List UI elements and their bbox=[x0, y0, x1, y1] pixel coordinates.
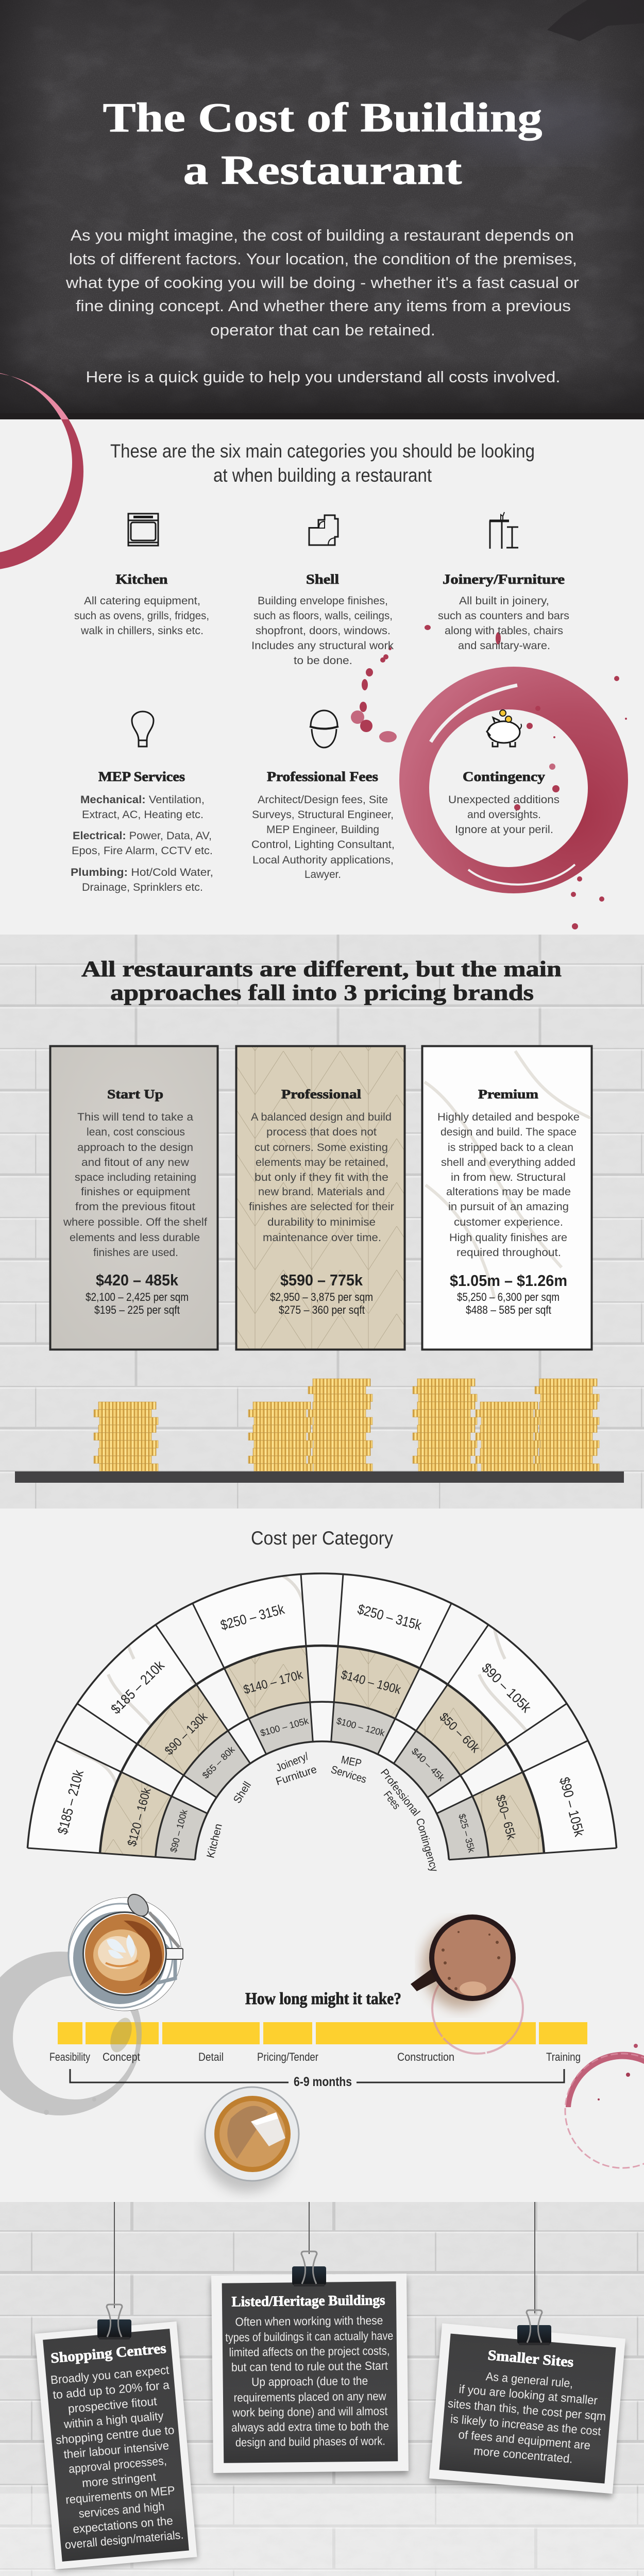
fan middle ring labels: $50 – 60k bbox=[436, 1710, 482, 1756]
card: premium: required throughout. bbox=[456, 1247, 561, 1259]
card: professional: but only if they fit with the bbox=[255, 1172, 388, 1183]
card: start up: elements and less durable bbox=[70, 1232, 200, 1244]
card: start up: $2,100 – 2,425 per sqm bbox=[86, 1291, 189, 1303]
fan middle ring labels: $90 – 130k bbox=[162, 1709, 211, 1758]
icon: bar counter and stool bbox=[489, 512, 518, 549]
card: start up: finishes are used. bbox=[93, 1247, 178, 1259]
illustration: latte cup bbox=[68, 1890, 183, 2011]
heading: six categories: at when building a restaurant bbox=[213, 465, 432, 486]
hanging note: listed and heritage buildings: Listed/Heritage Buildings bbox=[231, 2292, 385, 2310]
hanging note: listed and heritage buildings: requirements placed on any new bbox=[233, 2389, 386, 2404]
category: MEP services: Epos, Fire Alarm, CCTV etc. bbox=[72, 845, 213, 857]
category: professional fees: Professional Fees bbox=[267, 769, 378, 784]
fan middle ring labels: $140 – 190k bbox=[340, 1668, 403, 1697]
hanging note: shopping centres: expectations on the bbox=[72, 2514, 174, 2536]
wine stain: right ring bbox=[565, 2044, 644, 2168]
panel: paper categories background bbox=[0, 419, 644, 935]
timeline labels bbox=[49, 2050, 581, 2063]
category: MEP services: Electrical: Power, Data, AV, bbox=[73, 830, 212, 842]
timeline labels: Pricing/Tender bbox=[257, 2050, 318, 2063]
fan grid lines bbox=[27, 1573, 617, 1860]
intro text: As you might imagine, the cost of building a restaurant depends on bbox=[71, 226, 574, 244]
category: professional fees: MEP Engineer, Building bbox=[266, 824, 379, 836]
card: start up: $195 – 225 per sqft bbox=[94, 1303, 180, 1316]
fan middle ring labels bbox=[125, 1668, 518, 1848]
title bbox=[103, 95, 542, 193]
category: shell: shopfront, doors, windows. bbox=[256, 625, 391, 637]
hanging note: shopping centres: more stringent bbox=[81, 2470, 157, 2489]
card: premium: $1.05m – $1.26m bbox=[450, 1272, 567, 1290]
card: professional: new brand. Materials and bbox=[258, 1186, 385, 1198]
fan category labels: Services bbox=[330, 1764, 368, 1786]
timeline labels: Construction bbox=[397, 2050, 454, 2063]
card: premium: shell and everything added bbox=[441, 1157, 575, 1168]
category: kitchen bbox=[74, 514, 209, 637]
card: start up bbox=[50, 1046, 217, 1350]
card: start up: finishes or equipment bbox=[81, 1186, 190, 1198]
coin stacks bbox=[94, 1379, 599, 1471]
category: contingency: and oversights. bbox=[467, 809, 541, 821]
title: The Cost of Building bbox=[103, 95, 542, 141]
hanging note: smaller sites: As a general rule, bbox=[485, 2369, 573, 2390]
category: joinery and furniture: along with tables, chairs bbox=[445, 625, 563, 637]
intro text bbox=[65, 226, 579, 386]
fan category labels: Shell bbox=[231, 1780, 253, 1805]
duration bracket bbox=[70, 2069, 564, 2089]
icon: light bulb bbox=[132, 711, 154, 747]
hanging note: listed and heritage buildings: design and build phases of work. bbox=[235, 2434, 385, 2449]
card: premium: Highly detailed and bespoke bbox=[437, 1111, 580, 1123]
card: professional: finishes are selected for their bbox=[249, 1201, 394, 1213]
hanging note: listed and heritage buildings: types of buildings it can actually have bbox=[225, 2329, 393, 2344]
card: professional: maintenance over time. bbox=[263, 1232, 381, 1244]
card: start up: Start Up bbox=[107, 1088, 163, 1101]
category: MEP services: MEP Services bbox=[98, 769, 185, 784]
hanging note: shopping centres: overall design/materials. bbox=[64, 2528, 184, 2551]
category: joinery and furniture bbox=[438, 512, 569, 652]
fan middle ring labels: $120 – 160k bbox=[125, 1786, 154, 1848]
hanging note: shopping centres: Shopping Centres bbox=[50, 2341, 167, 2366]
category: kitchen: walk in chillers, sinks etc. bbox=[80, 625, 204, 637]
hanging note: listed and heritage buildings: work being done) and will almost bbox=[232, 2404, 388, 2419]
hanging note: smaller sites: is likely to increase as the cost bbox=[450, 2412, 602, 2438]
fan outer ring labels: $90 – 105k bbox=[479, 1660, 534, 1716]
card: professional: process that does not bbox=[266, 1126, 377, 1138]
category: contingency bbox=[448, 710, 560, 836]
fan category labels: Professional bbox=[378, 1767, 422, 1818]
hanging note: smaller sites: of fees and equipment are bbox=[458, 2428, 591, 2452]
intro text: what type of cooking you will be doing - whether it's a fast casual or bbox=[65, 274, 579, 292]
illustration: iced coffee glass bbox=[202, 2087, 299, 2192]
card: professional: $590 – 775k bbox=[280, 1271, 363, 1289]
card: premium: in pursuit of an amazing bbox=[448, 1201, 569, 1213]
fan category labels: MEP bbox=[340, 1754, 363, 1770]
timeline labels: Concept bbox=[103, 2050, 140, 2063]
hanging note: shopping centres: their labour intensive bbox=[63, 2438, 170, 2461]
hanging note: smaller sites bbox=[429, 2202, 625, 2498]
fan outer ring labels: $90 – 105k bbox=[556, 1775, 587, 1838]
card: start up: and fitout of any new bbox=[81, 1157, 190, 1168]
hanging note: shopping centres: to add up to 20% for a bbox=[52, 2378, 170, 2401]
hanging note: listed and heritage buildings: Up approach (due to the bbox=[251, 2374, 368, 2388]
icon: bulldog clip bbox=[97, 2304, 131, 2340]
fan inner ring labels: $40 – 45k bbox=[410, 1746, 447, 1784]
hanging note: shopping centres: Broadly you can expect bbox=[50, 2363, 170, 2387]
category: shell: Building envelope finishes, bbox=[258, 595, 388, 607]
hanging note: shopping centres: prospective fitout bbox=[67, 2394, 158, 2415]
card: premium: alterations may be made bbox=[446, 1186, 571, 1198]
card: professional: elements may be retained, bbox=[256, 1157, 388, 1168]
heading: how long might it take: How long might it take? bbox=[245, 1990, 401, 2008]
category: contingency: Ignore at your peril. bbox=[455, 824, 553, 836]
hanging note: shopping centres: services and high bbox=[78, 2499, 165, 2520]
icon: oven bbox=[128, 514, 158, 546]
category: joinery and furniture: All built in joinery, bbox=[459, 595, 549, 607]
fan outer ring labels: $185 – 210k bbox=[55, 1768, 87, 1836]
timeline labels: Detail bbox=[198, 2050, 224, 2063]
hanging note: shopping centres: shopping centre due to bbox=[55, 2423, 175, 2447]
category: shell: Includes any structural work bbox=[251, 640, 394, 652]
hanging note: shopping centres: approval processes, bbox=[68, 2454, 167, 2476]
category: kitchen: such as ovens, grills, fridges, bbox=[74, 610, 209, 622]
category: joinery and furniture: such as counters and bars bbox=[438, 610, 569, 622]
hanging note: listed and heritage buildings bbox=[211, 2202, 409, 2477]
icon: head with hard hat bbox=[310, 710, 338, 748]
card: start up: approach to the design bbox=[77, 1142, 193, 1154]
card: premium: is stripped back to a clean bbox=[448, 1142, 573, 1154]
category: MEP services bbox=[71, 711, 213, 893]
category: MEP services: Plumbing: Hot/Cold Water, bbox=[71, 867, 213, 878]
fan inner ring labels: $25 – 35k bbox=[456, 1812, 477, 1854]
heading: cost per category: Cost per Category bbox=[251, 1528, 393, 1549]
category: shell bbox=[251, 515, 394, 667]
category: joinery and furniture: Joinery/Furniture bbox=[443, 572, 565, 587]
intro text: operator that can be retained. bbox=[210, 321, 435, 339]
card: start up: lean, cost conscious bbox=[87, 1126, 185, 1138]
category: contingency: Contingency bbox=[463, 769, 545, 784]
fan outer ring labels bbox=[55, 1601, 587, 1838]
fan category labels bbox=[205, 1750, 440, 1873]
card: premium: design and build. The space bbox=[440, 1126, 577, 1138]
category: kitchen: All catering equipment, bbox=[84, 595, 200, 607]
fan inner ring labels: $65 – 80k bbox=[200, 1744, 237, 1781]
illustration: hot chocolate mug bbox=[411, 1914, 516, 2009]
panel: brick notes background bbox=[0, 2202, 644, 2576]
fan middle ring labels: $50– 65k bbox=[493, 1793, 518, 1841]
category: MEP services: Drainage, Sprinklers etc. bbox=[82, 882, 203, 893]
timeline bar bbox=[58, 2022, 587, 2044]
fan inner ring labels: $90 – 100k bbox=[168, 1808, 190, 1854]
fan category labels: Furniture bbox=[275, 1764, 318, 1788]
hanging note: smaller sites: if you are looking at smaller bbox=[459, 2382, 598, 2407]
heading: pricing brands bbox=[81, 957, 562, 1005]
coffee stain: grey ring bbox=[0, 1952, 142, 2115]
fan inner ring labels bbox=[168, 1716, 477, 1854]
category: joinery and furniture: and sanitary-ware. bbox=[458, 640, 550, 652]
hanging note: smaller sites: Smaller Sites bbox=[487, 2347, 574, 2370]
card: professional: cut corners. Some existing bbox=[255, 1142, 388, 1154]
card: start up: from the previous fitout bbox=[75, 1201, 195, 1213]
heading: pricing brands: approaches fall into 3 pricing brands bbox=[110, 981, 534, 1005]
card: premium: $5,250 – 6,300 per sqm bbox=[457, 1291, 560, 1303]
fan outer ring labels: $185 – 210k bbox=[108, 1657, 167, 1717]
intro text: lots of different factors. Your location, the condition of the premises, bbox=[69, 250, 577, 268]
card: professional: $275 – 360 per sqft bbox=[279, 1303, 365, 1316]
fan category labels: Joinery/ bbox=[274, 1750, 310, 1774]
icon: bulldog clip bbox=[292, 2251, 326, 2286]
card: premium: customer experience. bbox=[454, 1216, 563, 1228]
card: start up: where possible. Off the shelf bbox=[63, 1216, 207, 1228]
panel: paper cost and timeline background bbox=[0, 1509, 644, 2202]
fan ring: premium marble bbox=[27, 1574, 617, 1853]
card: premium bbox=[422, 1046, 591, 1350]
title: a Restaurant bbox=[183, 148, 462, 193]
panel: brick pricing background bbox=[0, 935, 644, 1509]
hanging note: smaller sites: more concentrated. bbox=[473, 2444, 573, 2466]
hanging note: shopping centres: requirements on MEP bbox=[65, 2483, 176, 2506]
fan inner ring labels: $100 – 105k bbox=[259, 1716, 310, 1738]
heading: six categories: These are the six main categories you should be looking bbox=[110, 440, 535, 462]
category: professional fees: Local Authority applications, bbox=[252, 854, 394, 866]
category: professional fees: Lawyer. bbox=[304, 869, 341, 880]
category: kitchen: Kitchen bbox=[115, 572, 168, 587]
fan chart: cost per category bbox=[27, 1573, 617, 1873]
fan ring: start up concrete bbox=[156, 1702, 488, 1860]
category: contingency: Unexpected additions bbox=[448, 794, 560, 806]
card: start up: space including retaining bbox=[75, 1172, 196, 1183]
icon: piggy bank bbox=[487, 710, 521, 747]
category: professional fees bbox=[251, 710, 395, 880]
wine stain: large ring with splashes bbox=[351, 625, 628, 929]
heading: pricing brands: All restaurants are different, but the main bbox=[81, 957, 562, 981]
category: professional fees: Control, Lighting Consultant, bbox=[251, 839, 395, 851]
intro text: Here is a quick guide to help you understand all costs involved. bbox=[86, 368, 561, 386]
hanging note: smaller sites: sites than this, the cost per sqm bbox=[447, 2397, 606, 2423]
card: premium: Premium bbox=[478, 1088, 538, 1101]
fan inner ring labels: $100 – 120k bbox=[335, 1716, 386, 1738]
wine stain: top-left ring bbox=[0, 371, 83, 570]
fan category labels: Contingency bbox=[414, 1817, 440, 1873]
hanging note: listed and heritage buildings: Often when working with these bbox=[235, 2314, 383, 2329]
category: professional fees: Architect/Design fees, Site bbox=[258, 794, 388, 806]
timeline labels: Feasibility bbox=[49, 2050, 90, 2063]
card: premium: in from new. Structural bbox=[451, 1172, 566, 1183]
intro text: fine dining concept. And whether there any items from a previous bbox=[76, 297, 571, 315]
wine stain: thin ring under mug bbox=[432, 1963, 523, 2054]
card: start up: This will tend to take a bbox=[77, 1111, 193, 1123]
duration bracket: 6-9 months bbox=[294, 2075, 352, 2089]
shelf bbox=[15, 1471, 624, 1483]
panel: chalkboard header bbox=[0, 0, 644, 419]
fan middle ring labels: $140 – 170k bbox=[242, 1668, 304, 1697]
icon: bulldog clip bbox=[517, 2310, 551, 2345]
card: premium: High quality finishes are bbox=[449, 1232, 567, 1244]
icon: floor plan bbox=[309, 515, 338, 545]
category: MEP services: Mechanical: Ventilation, bbox=[80, 794, 205, 806]
fan ring: professional wood bbox=[100, 1647, 544, 1857]
category: shell: such as floors, walls, ceilings, bbox=[253, 610, 393, 622]
hanging note: listed and heritage buildings: always add extra time to both the bbox=[231, 2419, 389, 2434]
hanging note: listed and heritage buildings: but can tend to rule out the Start bbox=[231, 2359, 388, 2374]
fan outer ring labels: $250 – 315k bbox=[219, 1601, 286, 1633]
hanging note: listed and heritage buildings: limited affects on the project costs, bbox=[229, 2344, 390, 2359]
card: professional: durability to minimise bbox=[267, 1216, 376, 1228]
card: start up: $420 – 485k bbox=[96, 1271, 179, 1289]
timeline labels: Training bbox=[546, 2050, 581, 2063]
card: premium: $488 – 585 per sqft bbox=[466, 1303, 551, 1316]
category: shell: Shell bbox=[306, 572, 339, 587]
card: professional: A balanced design and build bbox=[251, 1111, 392, 1123]
card: professional bbox=[236, 1046, 405, 1350]
category: professional fees: Surveys, Structural Engineer, bbox=[252, 809, 394, 821]
fan outer ring labels: $250 – 315k bbox=[356, 1601, 423, 1633]
card: professional: $2,950 – 3,875 per sqm bbox=[270, 1291, 373, 1303]
heading: six categories bbox=[110, 440, 535, 486]
card: professional: Professional bbox=[281, 1088, 361, 1101]
category: shell: to be done. bbox=[294, 655, 352, 667]
hanging note: shopping centres bbox=[35, 2202, 197, 2571]
hanging note: shopping centres: within a high quality bbox=[63, 2409, 164, 2431]
fan category labels: Kitchen bbox=[205, 1822, 225, 1859]
fan category labels: Fees bbox=[381, 1789, 402, 1811]
category: MEP services: Extract, AC, Heating etc. bbox=[82, 809, 204, 821]
